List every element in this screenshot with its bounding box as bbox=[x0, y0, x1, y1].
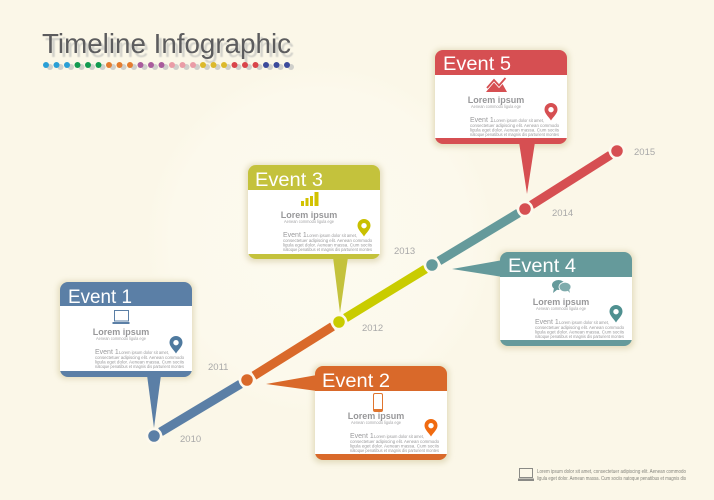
panel: event 1 bbox=[58, 281, 194, 428]
footer note: Lorem ipsum dolor sit amet, consectetuer adipiscing elit. Aenean commodo bbox=[537, 469, 686, 475]
panel: event 2: natoque penatibus et magnis dis parturient montes bbox=[350, 448, 439, 453]
panel: event 3: Event 3 bbox=[255, 170, 323, 191]
icon: bar chart bbox=[301, 192, 318, 206]
panel: event 5: natoque penatibus et magnis dis parturient montes bbox=[470, 132, 559, 137]
icon: map pin bbox=[610, 305, 622, 322]
title dotted rule bbox=[43, 62, 294, 70]
footer note: ligula eget dolor. Aenean massa. Cum sociis natoque penatibus et magnis dis bbox=[537, 476, 686, 482]
panel: event 1: Lorem ipsum bbox=[93, 327, 149, 337]
panel: event 1: Aenean commodo ligula ege bbox=[96, 336, 147, 341]
year labels: 2013 bbox=[394, 246, 415, 257]
panel: event 1: Lorem ipsum dolor sit amet, bbox=[119, 350, 169, 355]
panel: event 1: natoque penatibus et magnis dis parturient montes bbox=[95, 364, 184, 369]
title: Timeline Infographic bbox=[45, 32, 294, 63]
panel: event 4: consectetuer adipiscing elit. Aenean commodo bbox=[535, 325, 625, 330]
panel: event 1: Event 1 bbox=[68, 287, 132, 308]
icon: mountains bbox=[486, 78, 507, 92]
icon: map pin bbox=[544, 103, 558, 120]
panel: event 2: Lorem ipsum dolor sit amet, bbox=[374, 434, 424, 439]
panel: event 2: consectetuer adipiscing elit. Aenean commodo bbox=[350, 439, 440, 444]
panel: event 4: Lorem ipsum bbox=[533, 297, 589, 307]
panel: event 5: Lorem ipsum bbox=[468, 95, 524, 105]
year labels: 2012 bbox=[362, 323, 383, 334]
year labels: 2014 bbox=[552, 208, 573, 219]
panel: event 5: consectetuer adipiscing elit. Aenean commodo bbox=[470, 123, 560, 128]
panel: event 4: Aenean commodo ligula ege bbox=[536, 306, 587, 311]
panel: event 1: ligula eget dolor. Aenean massa. Cum sociis bbox=[95, 360, 184, 364]
panel: event 2: ligula eget dolor. Aenean massa. Cum sociis bbox=[350, 444, 439, 448]
panel: event 3: natoque penatibus et magnis dis parturient montes bbox=[283, 247, 372, 252]
timeline line bbox=[160, 155, 610, 432]
panel: event 3: Event 1 bbox=[283, 232, 307, 239]
panel: event 4: Event 4 bbox=[508, 256, 576, 277]
panel: event 1: consectetuer adipiscing elit. Aenean commodo bbox=[95, 355, 185, 360]
timeline nodes bbox=[147, 144, 624, 443]
year labels: 2015 bbox=[634, 147, 655, 158]
panel: event 2: Event 2 bbox=[322, 371, 390, 392]
panel: event 4: Event 1 bbox=[535, 319, 559, 326]
title: Timeline Infographic bbox=[42, 28, 291, 59]
panel: event 2: Lorem ipsum bbox=[348, 411, 404, 421]
panel: event 4: natoque penatibus et magnis dis parturient montes bbox=[535, 334, 624, 339]
panel: event 5: Aenean commodo ligula ege bbox=[471, 104, 522, 109]
panel: event 4: ligula eget dolor. Aenean massa. Cum sociis bbox=[535, 330, 624, 334]
panel: event 3: ligula eget dolor. Aenean massa. Cum sociis bbox=[283, 242, 372, 248]
icon: map pin bbox=[170, 336, 182, 354]
year labels: 2010 bbox=[180, 434, 201, 445]
panel: event 4 bbox=[452, 251, 634, 349]
icon: phone bbox=[374, 394, 382, 412]
year labels: 2011 bbox=[208, 362, 228, 373]
panel: event 3: Aenean commodo ligula ege bbox=[284, 219, 335, 224]
icon: map pin bbox=[424, 419, 438, 436]
icon: map pin bbox=[358, 219, 370, 236]
icon: chat bubbles bbox=[552, 280, 571, 293]
panel: event 3: consectetuer adipiscing elit. Aenean commodo bbox=[283, 238, 373, 243]
panel: event 3: Lorem ipsum dolor sit amet, bbox=[307, 233, 357, 238]
panel: event 5: ligula eget dolor. Aenean massa. Cum sociis bbox=[470, 128, 559, 132]
icon: laptop bbox=[112, 310, 130, 324]
panel: event 5: Event 5 bbox=[443, 54, 511, 75]
panel: event 4: Lorem ipsum dolor sit amet, bbox=[559, 320, 609, 325]
panel: event 5: Event 1 bbox=[470, 117, 494, 124]
footer note bbox=[518, 468, 686, 482]
panel: event 3 bbox=[246, 164, 382, 313]
panel: event 5: Lorem ipsum dolor sit amet, bbox=[494, 118, 544, 123]
panel: event 2: Aenean commodo ligula ege bbox=[351, 420, 402, 425]
year labels bbox=[180, 147, 655, 445]
panel: event 2 bbox=[266, 365, 449, 463]
icon: footer laptop bbox=[518, 468, 534, 481]
panel: event 3: Lorem ipsum bbox=[281, 210, 337, 220]
panel: event 1: Event 1 bbox=[95, 349, 119, 356]
panel: event 5 bbox=[433, 49, 569, 194]
panel: event 2: Event 1 bbox=[350, 433, 374, 440]
